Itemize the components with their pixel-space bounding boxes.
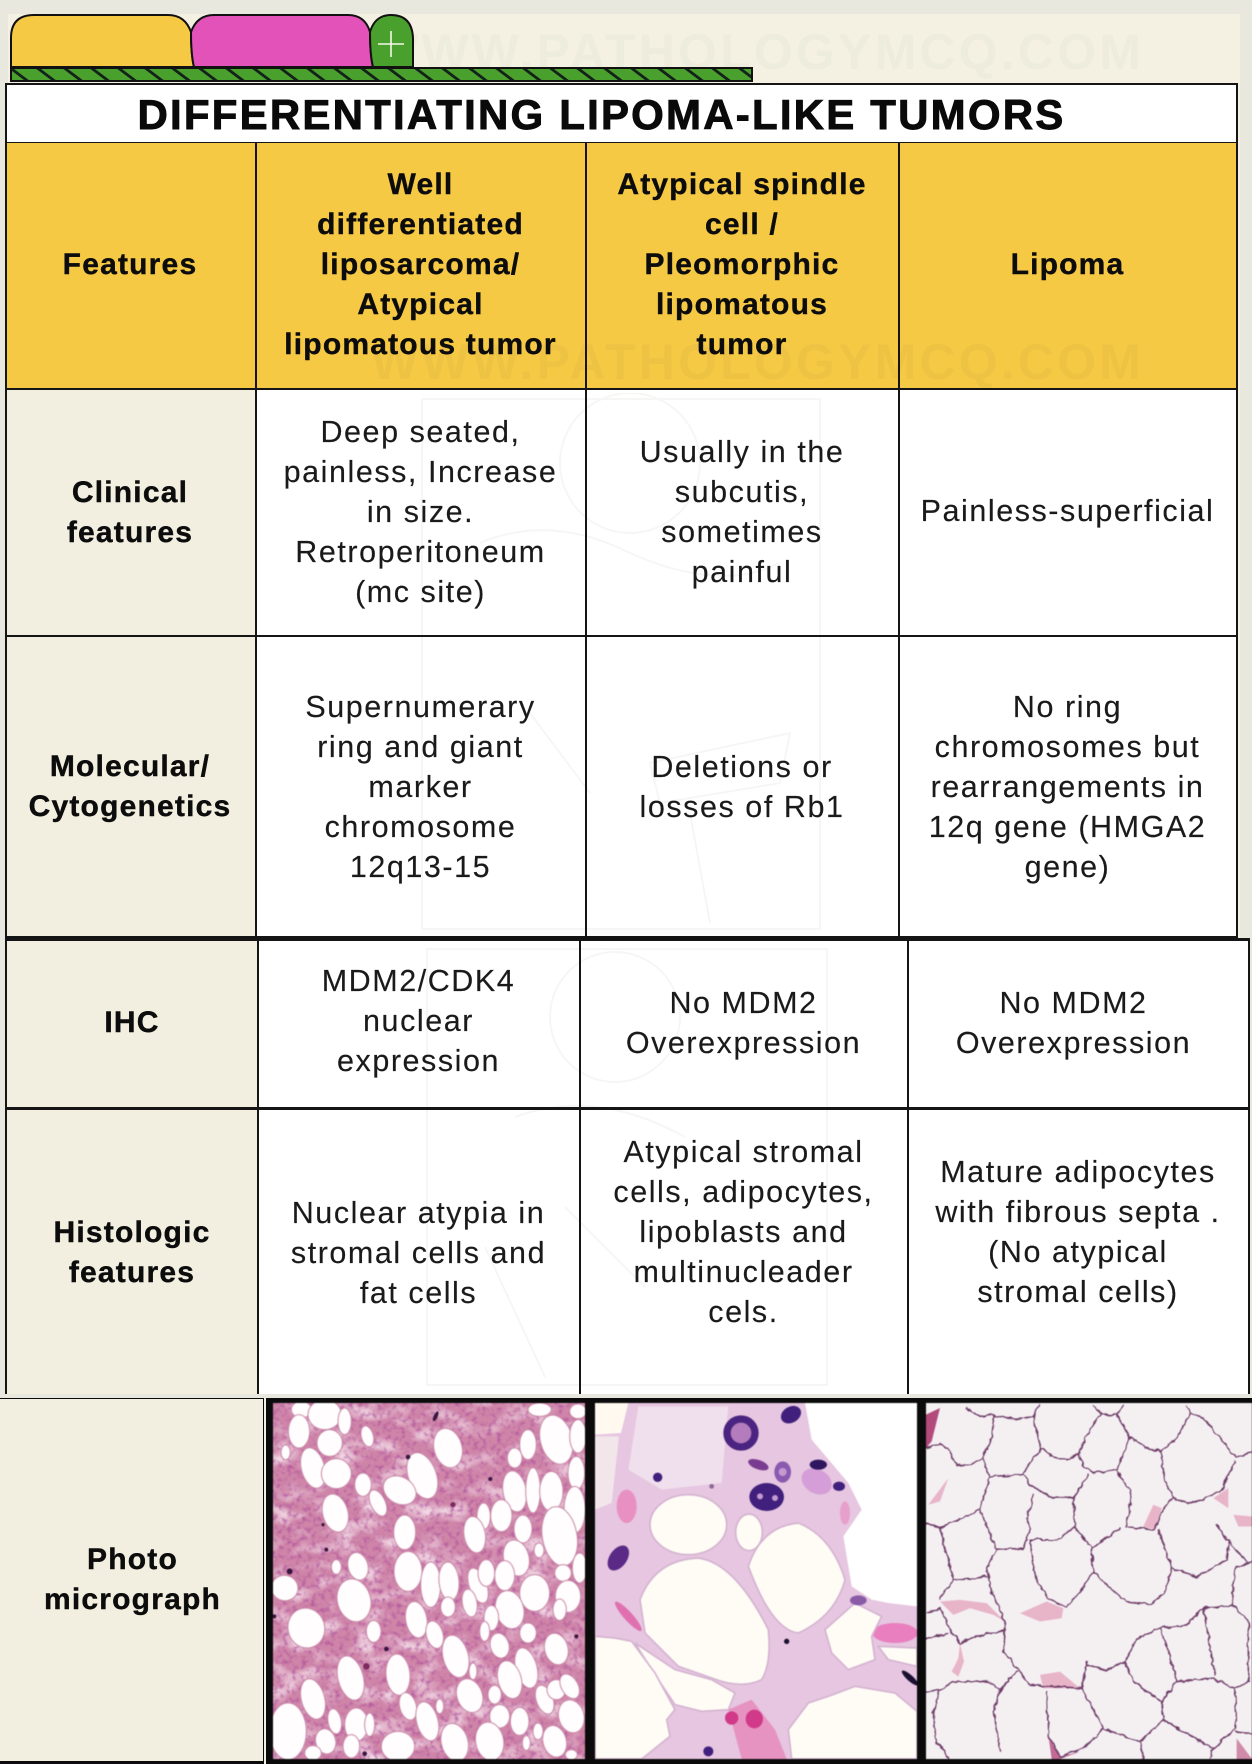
- data cells background: [256, 389, 1237, 938]
- row label: Clinical features: features: [67, 516, 193, 549]
- header: Atypical spindle cell: [617, 168, 867, 361]
- cell: molecular, liposarcoma: ring and giant: [317, 730, 524, 764]
- cell: molecular, lipoma: 12q gene (HMGA2: [929, 810, 1206, 844]
- row label: Clinical features: [67, 476, 193, 549]
- cell: histologic, spindle: [613, 1135, 874, 1329]
- cell: clinical, liposarcoma: painless, Increase: [284, 455, 557, 489]
- watermark: cartoon outline: [421, 393, 821, 930]
- cell: molecular, lipoma: gene): [1025, 850, 1110, 884]
- cell: histologic, lipoma: Mature adipocytes: [940, 1155, 1216, 1189]
- header: Atypical spindle cell: cell /: [705, 208, 779, 241]
- cell: molecular, liposarcoma: 12q13-15: [350, 850, 491, 884]
- row label: Clinical features: Clinical: [72, 476, 188, 509]
- cell: histologic, spindle: cells, adipocytes,: [613, 1175, 874, 1209]
- cell: IHC, lipoma: No MDM2: [999, 986, 1148, 1020]
- cell: IHC, lipoma: [956, 986, 1191, 1060]
- cell: IHC, spindle: No MDM2: [669, 986, 818, 1020]
- cell: histologic, spindle: multinucleader: [633, 1255, 854, 1289]
- row label text: Photo: [87, 1543, 178, 1576]
- row label: Molecular/Cytogenetics: Cytogenetics: [29, 790, 231, 823]
- header: Atypical spindle cell: lipomatous: [656, 288, 828, 321]
- cell: molecular, spindle: Deletions or: [651, 750, 833, 784]
- cell: IHC, lipoma: Overexpression: [956, 1026, 1191, 1060]
- cell: molecular, lipoma: rearrangements in: [931, 770, 1204, 804]
- row label: Molecular/Cytogenetics: Molecular/: [50, 750, 210, 783]
- cell: histologic, lipoma: stromal cells): [977, 1275, 1179, 1309]
- cell: histologic, lipoma: [935, 1155, 1221, 1309]
- cell: clinical, liposarcoma: in size.: [367, 495, 474, 529]
- cell: molecular, liposarcoma: [305, 690, 536, 884]
- cell: histologic, spindle: Atypical stromal: [623, 1135, 864, 1169]
- header: Lipoma: Lipoma: [1011, 248, 1124, 281]
- row label: IHC: IHC: [104, 1006, 160, 1039]
- panel: upper table: [5, 83, 1238, 938]
- data cells background: [257, 939, 1248, 1394]
- cell: clinical, liposarcoma: Deep seated,: [320, 415, 521, 449]
- cell: molecular, liposarcoma: Supernumerary: [305, 690, 536, 724]
- cell: histologic, lipoma: with fibrous septa .: [935, 1195, 1221, 1229]
- row label: Histologic features: Histologic: [53, 1216, 210, 1249]
- separator line: [264, 1398, 266, 1764]
- watermark: top: WWW.PATHOLOGYMCQ.COM: [371, 24, 1144, 80]
- cell: molecular, liposarcoma: marker: [368, 770, 473, 804]
- first column background: [5, 389, 256, 938]
- cell: clinical, liposarcoma: [284, 415, 557, 609]
- micrograph 1: well differentiated liposarcoma: [272, 1402, 586, 1760]
- cell: molecular, liposarcoma: chromosome: [325, 810, 516, 844]
- cell: clinical, spindle: subcutis,: [675, 475, 809, 509]
- header: Well differentiated liposarcoma: Well: [388, 168, 453, 201]
- page background panel: [8, 14, 1240, 1394]
- cell: IHC, spindle: Overexpression: [626, 1026, 861, 1060]
- cell: molecular, spindle: [640, 750, 844, 824]
- cell: clinical, lipoma: Painless-superficial: [921, 494, 1214, 528]
- watermark: cartoon outline lower: [426, 948, 828, 1386]
- cell: histologic, spindle: lipoblasts and: [639, 1215, 848, 1249]
- row label: Histologic features: [53, 1216, 210, 1289]
- row label text: micrograph: [44, 1583, 221, 1616]
- header: Well differentiated liposarcoma: liposarcoma/: [321, 248, 520, 281]
- cell: IHC, liposarcoma: MDM2/CDK4: [322, 964, 515, 998]
- header row background: [5, 143, 1236, 389]
- first column background: [7, 939, 257, 1394]
- cell: IHC, liposarcoma: nuclear: [363, 1004, 474, 1038]
- cell: histologic, liposarcoma: fat cells: [360, 1276, 477, 1310]
- cell: IHC, liposarcoma: expression: [337, 1044, 500, 1078]
- cell: histologic, liposarcoma: stromal cells and: [291, 1236, 546, 1270]
- header: Well differentiated liposarcoma: Atypical: [357, 288, 484, 321]
- cell: molecular, lipoma: chromosomes but: [935, 730, 1200, 764]
- panel: photomicrograph row: [0, 1398, 1252, 1764]
- cell: histologic, liposarcoma: Nuclear atypia in: [292, 1196, 545, 1230]
- header: Well differentiated liposarcoma: lipomatous tumor: [284, 328, 557, 361]
- watermark: header: WWW.PATHOLOGYMCQ.COM: [371, 334, 1144, 390]
- header: Well differentiated liposarcoma: differentiated: [317, 208, 524, 241]
- cell: clinical, liposarcoma: Retroperitoneum: [295, 535, 546, 569]
- title: [5, 83, 1238, 144]
- cell: histologic, lipoma: (No atypical: [988, 1235, 1168, 1269]
- header: Atypical spindle cell: tumor: [696, 328, 788, 361]
- cell: clinical, spindle: [640, 435, 844, 589]
- folder tabs decoration: [10, 14, 753, 82]
- cell: molecular, spindle: losses of Rb1: [640, 790, 844, 824]
- cell: clinical, spindle: Usually in the: [640, 435, 844, 469]
- cell: IHC, spindle: [626, 986, 861, 1060]
- cell: molecular, lipoma: No ring: [1013, 690, 1122, 724]
- cell: clinical, liposarcoma: (mc site): [355, 575, 486, 609]
- micrograph 3: lipoma: [925, 1402, 1252, 1760]
- cell: clinical, spindle: sometimes: [661, 515, 823, 549]
- panel: lower table: [5, 938, 1250, 1394]
- cell: histologic, spindle: cels.: [708, 1295, 779, 1329]
- cell: clinical, spindle: painful: [692, 555, 792, 589]
- header: Atypical spindle cell: Atypical spindle: [617, 168, 867, 201]
- cell: molecular, lipoma: [929, 690, 1206, 884]
- row label: Molecular/Cytogenetics: [29, 750, 231, 823]
- cell: IHC, liposarcoma: [322, 964, 515, 1078]
- row label text: [44, 1543, 221, 1616]
- header: Features: Features: [63, 248, 197, 281]
- row label: Histologic features: features: [69, 1256, 195, 1289]
- micrograph 2: atypical spindle cell lipomatous tumor: [594, 1402, 918, 1760]
- header: Atypical spindle cell: Pleomorphic: [645, 248, 839, 281]
- header: Well differentiated liposarcoma: [284, 168, 557, 361]
- title: DIFFERENTIATING LIPOMA-LIKE TUMORS: [138, 91, 1065, 138]
- row label panel: Photo micrograph: [0, 1399, 263, 1761]
- cell: histologic, liposarcoma: [291, 1196, 546, 1310]
